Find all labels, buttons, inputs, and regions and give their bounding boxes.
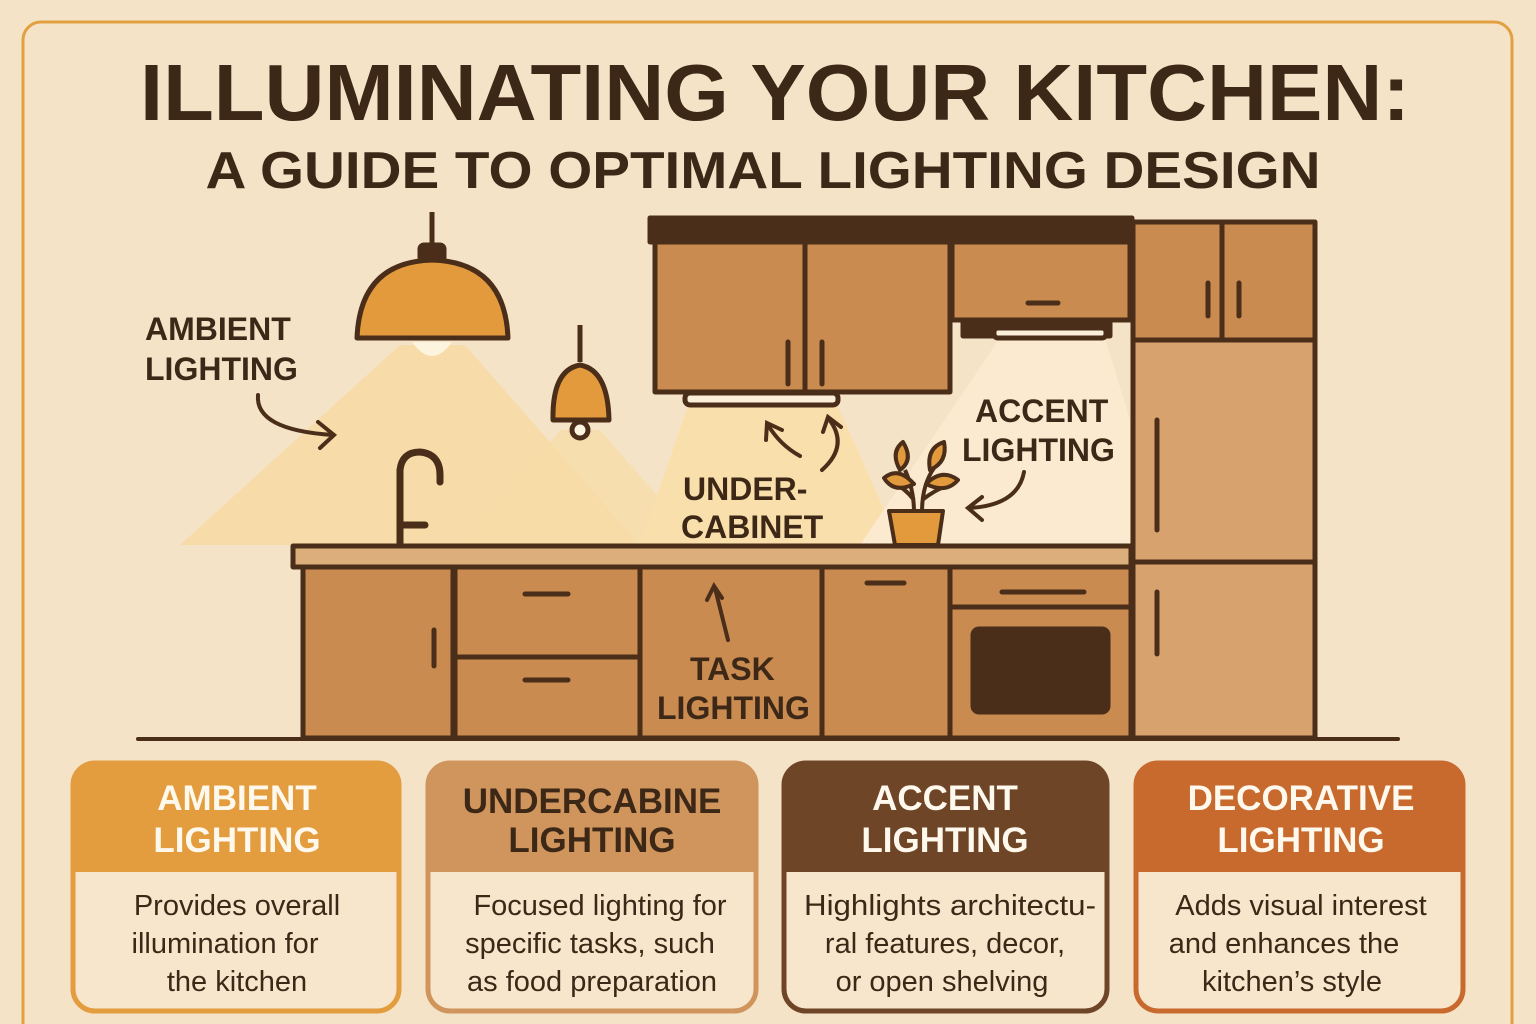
arrow: task — [707, 586, 728, 640]
icon: plant — [884, 442, 958, 545]
card: decorative: and enhances the — [1169, 928, 1399, 960]
card: undercabinet: Focused lighting for — [473, 890, 727, 922]
arrow: ambient — [258, 395, 334, 448]
label: task lighting — [657, 651, 810, 726]
label: under-cabinet: UNDER- — [683, 471, 807, 507]
card: decorative: DECORATIVE — [1188, 779, 1414, 818]
light glow — [180, 338, 1130, 545]
label: ambient lighting — [145, 311, 298, 387]
card: decorative: Adds visual interest — [1175, 890, 1427, 922]
card: decorative: kitchen’s style — [1202, 966, 1382, 998]
label: ambient lighting: AMBIENT — [145, 311, 291, 347]
arrow: accent — [968, 472, 1024, 520]
card: undercabinet — [428, 763, 756, 1011]
kitchen illustration — [138, 218, 1398, 739]
upper cabinets — [650, 218, 1132, 405]
card: accent: or open shelving — [836, 966, 1048, 998]
card: ambient: Provides overall — [134, 890, 340, 922]
label: task lighting: TASK — [690, 651, 775, 687]
icon: faucet — [400, 452, 440, 545]
label: accent lighting — [962, 393, 1115, 468]
label: under-cabinet — [681, 471, 824, 545]
card: ambient: AMBIENT — [157, 779, 317, 818]
card: undercabinet: UNDERCABINE — [463, 782, 721, 821]
card: ambient — [73, 763, 399, 1011]
card: ambient: LIGHTING — [153, 821, 321, 860]
card: decorative — [1136, 763, 1463, 1011]
label: task lighting: LIGHTING — [657, 690, 810, 726]
icon: small pendant lamp — [553, 325, 609, 438]
label: under-cabinet: CABINET — [681, 509, 824, 545]
card: undercabinet: specific tasks, such — [465, 928, 715, 960]
card: accent — [784, 763, 1107, 1011]
card: decorative: LIGHTING — [1217, 821, 1385, 860]
card: undercabinet: LIGHTING — [508, 821, 676, 860]
card: ambient: the kitchen — [167, 966, 307, 998]
subtitle: A GUIDE TO OPTIMAL LIGHTING DESIGN — [206, 142, 1320, 200]
countertop — [293, 546, 1131, 567]
label: accent lighting: ACCENT — [975, 393, 1109, 429]
arrows: under-cabinet — [766, 417, 841, 470]
card: accent: LIGHTING — [861, 821, 1029, 860]
card: accent: ral features, decor, — [825, 928, 1065, 960]
tall unit / fridge — [1133, 222, 1315, 738]
card: accent: ACCENT — [872, 779, 1018, 818]
label: accent lighting: LIGHTING — [962, 432, 1115, 468]
title: ILLUMINATING YOUR KITCHEN: — [140, 48, 1410, 137]
card: ambient: illumination for — [132, 928, 319, 960]
label: ambient lighting: LIGHTING — [145, 351, 298, 387]
base cabinets — [303, 567, 1131, 738]
icon: large pendant lamp — [357, 212, 508, 356]
card: accent: Highlights architectu- — [804, 890, 1096, 922]
card: undercabinet: as food preparation — [467, 966, 717, 998]
